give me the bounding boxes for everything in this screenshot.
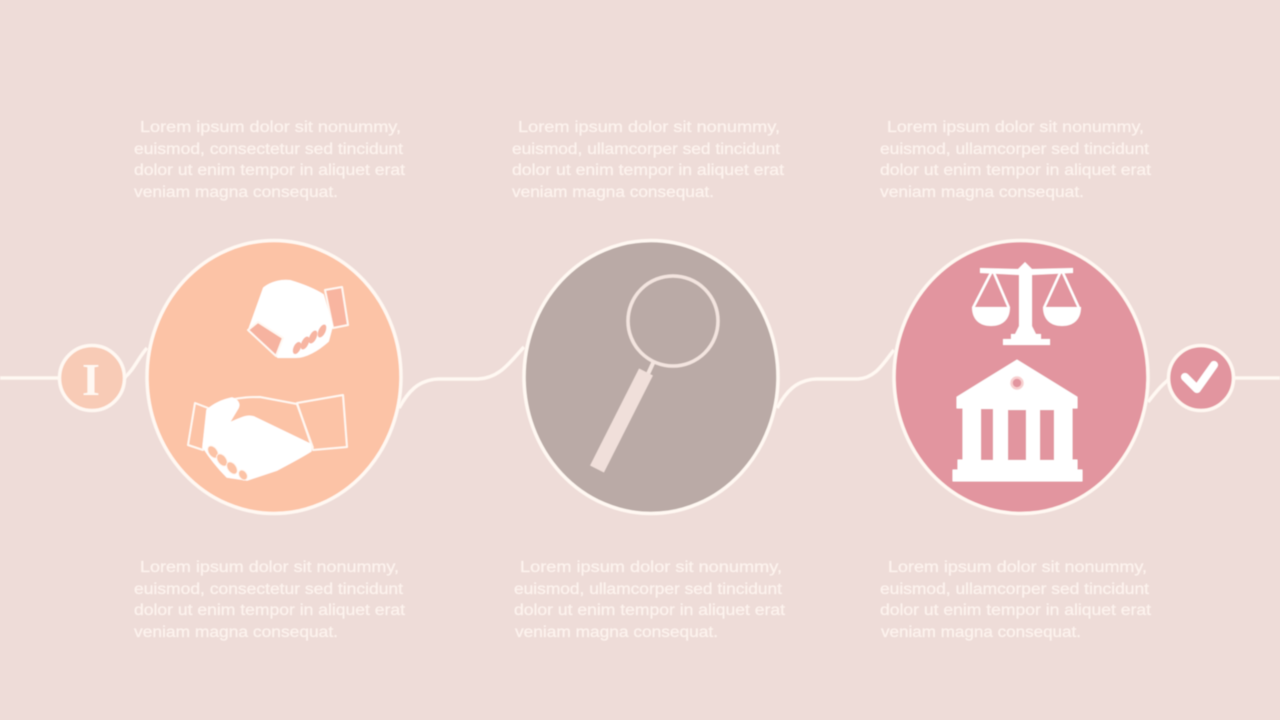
start marker letter: I: [82, 354, 100, 405]
text block: bottom 2: dolor ut enim tempor in aliquet erat: [514, 602, 786, 619]
text block: bottom 2: euismod, ullamcorper sed tincidunt: [514, 581, 783, 598]
icon: large handshake: [188, 395, 347, 482]
text block: top 1: dolor ut enim tempor in aliquet erat: [134, 162, 406, 179]
panel: handshake circle: [147, 240, 401, 514]
icon: small handshake: [248, 281, 348, 357]
text block: bottom 1: dolor ut enim tempor in aliquet erat: [134, 602, 406, 619]
panel: justice circle: [894, 240, 1148, 514]
text block: top 3: euismod, ullamcorper sed tincidunt: [880, 141, 1150, 158]
start marker: [60, 346, 124, 410]
text block: top 3: [880, 119, 1152, 201]
text block: bottom 1: Lorem ipsum dolor sit nonummy,: [140, 559, 399, 576]
text block: top 1: [134, 119, 406, 201]
end marker: [1168, 346, 1234, 410]
text block: top 3: dolor ut enim tempor in aliquet erat: [880, 162, 1152, 179]
text block: top 1: euismod, consectetur sed tincidunt: [134, 141, 404, 158]
icon: courthouse: [953, 360, 1082, 481]
text block: top 1: Lorem ipsum dolor sit nonummy,: [140, 119, 401, 136]
connecting timeline line: [0, 347, 1280, 408]
text block: bottom 3: Lorem ipsum dolor sit nonummy,: [888, 559, 1147, 576]
text block: top 2: dolor ut enim tempor in aliquet erat: [512, 162, 785, 179]
text block: top 2: [512, 119, 785, 201]
text block: bottom 2: veniam magna consequat.: [515, 624, 718, 641]
text block: bottom 2: Lorem ipsum dolor sit nonummy,: [520, 559, 782, 576]
text block: top 2: Lorem ipsum dolor sit nonummy,: [518, 119, 780, 136]
text block: bottom 3: dolor ut enim tempor in aliquet erat: [880, 602, 1152, 619]
icon: scales: [972, 262, 1081, 345]
text block: top 3: veniam magna consequat.: [880, 184, 1084, 201]
text block: top 1: veniam magna consequat.: [134, 184, 338, 201]
text block: bottom 3: veniam magna consequat.: [881, 624, 1081, 641]
icon: magnifying glass: [597, 276, 718, 469]
text block: bottom 2: [514, 559, 786, 641]
panel: magnifier circle: [524, 240, 778, 514]
text block: bottom 3: euismod, ullamcorper sed tincidunt: [880, 581, 1150, 598]
text block: bottom 1: veniam magna consequat.: [134, 624, 338, 641]
text block: bottom 1: [134, 559, 406, 641]
text block: bottom 3: [880, 559, 1152, 641]
icon: check mark: [1185, 365, 1214, 389]
text block: top 2: euismod, ullamcorper sed tincidunt: [512, 141, 781, 158]
text block: top 2: veniam magna consequat.: [512, 184, 714, 201]
text block: top 3: Lorem ipsum dolor sit nonummy,: [887, 119, 1144, 136]
text block: bottom 1: euismod, consectetur sed tincidunt: [134, 581, 404, 598]
